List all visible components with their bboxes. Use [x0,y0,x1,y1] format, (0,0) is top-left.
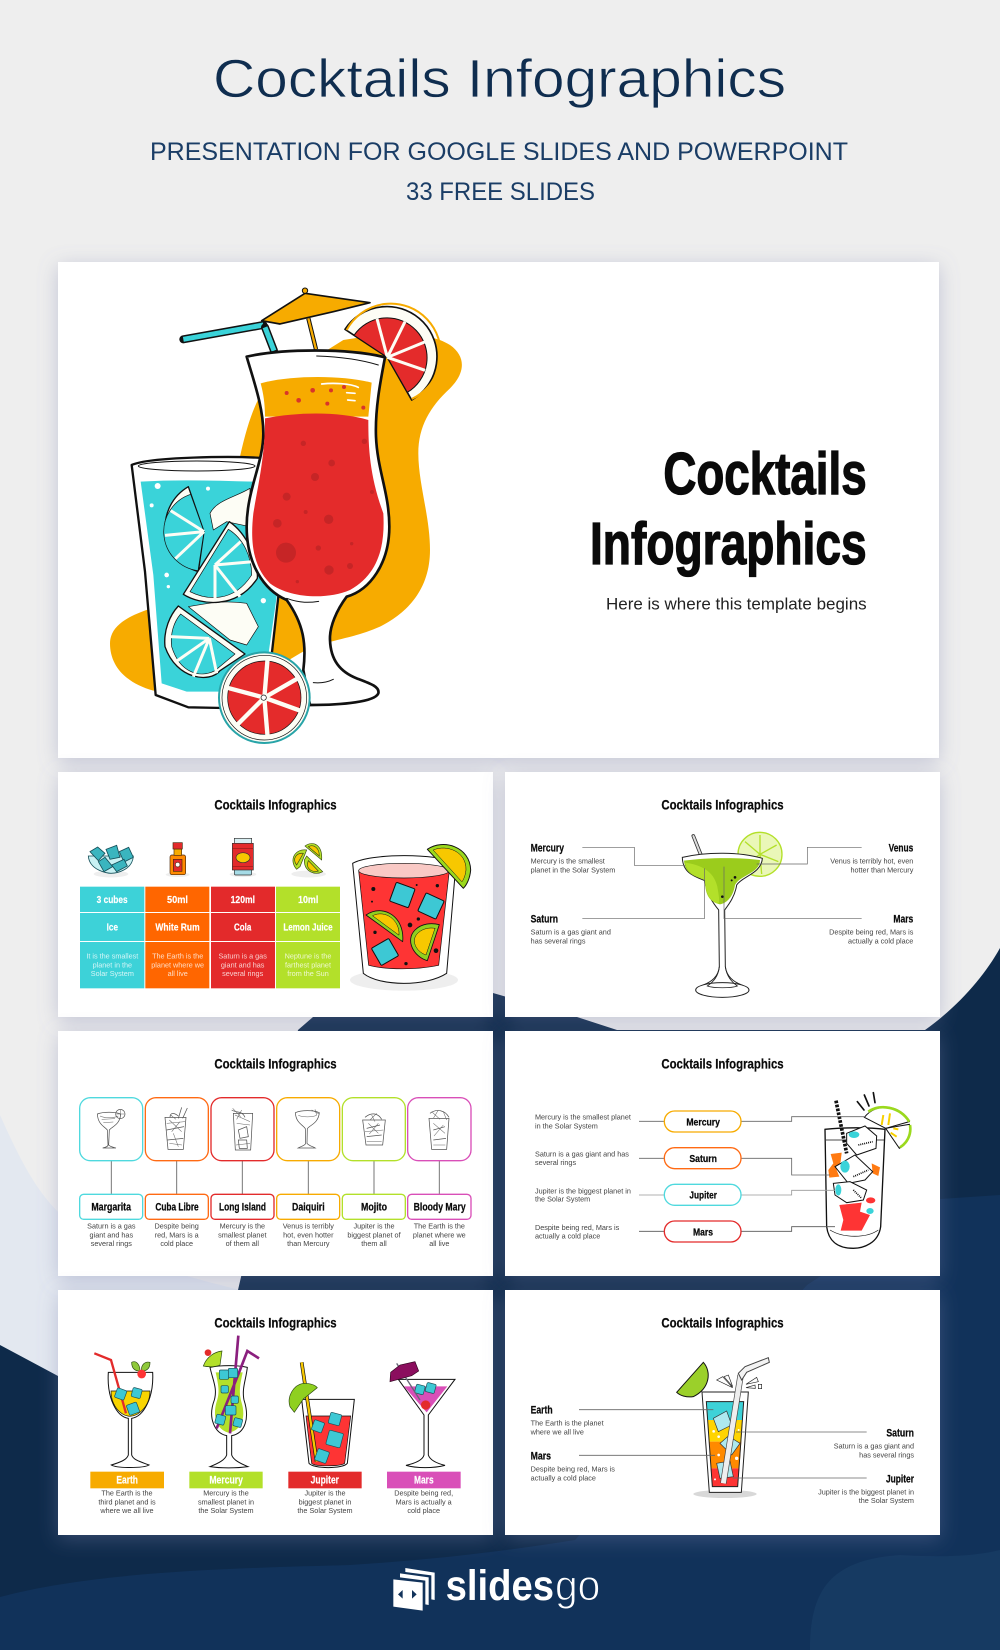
name pills [80,1194,471,1219]
label: Saturn [531,913,611,945]
pill labels: Mars [693,1227,713,1238]
drink: Earth [94,1353,153,1467]
illustration: margarita glass [682,832,782,997]
icon: rum bottle [166,843,190,877]
panel: margarita slide [505,772,940,1017]
table: ingredients: from the Sun [287,969,329,978]
hero title: Infographics [590,510,867,577]
descriptions: Mars is actually a [396,1497,453,1506]
table: ingredients: planet in the [93,960,132,969]
label: Venus: hotter than Mercury [850,865,914,874]
logo: slidesgo: go [555,1562,600,1610]
descriptions: Mercury is the [203,1489,249,1498]
table: ingredients: 10ml [298,895,319,906]
label: Venus: Venus [889,843,913,855]
pills [664,1111,741,1242]
connector lines [579,1410,867,1478]
pill labels: Jupiter [689,1191,717,1202]
table: ingredients: 50ml [167,895,188,906]
label: Earth [530,1405,604,1436]
panel: tall glass slide [505,1031,940,1276]
cocktail names: Cuba Libre [155,1201,199,1213]
illustration: cocktails [110,288,462,743]
label: Jupiter [818,1473,914,1505]
slide heading: Cocktails Infographics [214,796,337,812]
label: Mars: Despite being red, Mars is [531,1465,615,1474]
descriptions: Jupiter is the [353,1222,395,1231]
label: Saturn: Saturn [886,1428,914,1440]
descriptions: Saturn is a gas [87,1222,136,1231]
pill labels [686,1117,720,1238]
label: Saturn [834,1428,914,1459]
descriptions: several rings [535,1158,576,1167]
hero title: Cocktails [663,440,867,507]
descriptions: all live [429,1239,449,1248]
label bars: Mercury [209,1475,243,1487]
slide heading: Cocktails Infographics [661,796,784,812]
descriptions: Mercury is the smallest planet [535,1113,631,1122]
label: Mercury [531,843,615,874]
descriptions: Despite being [154,1222,199,1231]
descriptions: the Solar System [297,1506,353,1515]
illustration: tall glass [825,1093,910,1248]
connector lines [639,1117,865,1231]
descriptions: cold place [407,1506,440,1515]
label: Mars: Mars [893,913,913,925]
label: Mars: Despite being red, Mars is [829,928,914,937]
label: Mercury: planet in the Solar System [531,865,615,874]
panel: hero slide [58,262,939,758]
connector lines [582,847,862,919]
descriptions: biggest planet of [347,1230,402,1239]
descriptions: The Earth is the [414,1222,465,1231]
slide heading: Cocktails Infographics [214,1314,337,1330]
label: Mercury: Mercury [531,843,565,855]
pill labels: Mercury [686,1117,720,1128]
cocktail names: Margarita [91,1201,131,1213]
descriptions: them all [361,1239,387,1248]
descriptions: giant and has [90,1230,133,1239]
label: Mercury: Mercury is the smallest [531,857,605,866]
label: Jupiter: Jupiter [886,1473,914,1485]
panel: six cocktails slide [58,1031,493,1276]
descriptions: in the Solar System [535,1121,598,1130]
label: Saturn: Saturn is a gas giant and [531,928,611,937]
panel: ingredients table slide [58,772,493,1017]
table: ingredients: several rings [222,969,264,978]
cocktail names: Long Island [219,1201,266,1213]
label: Jupiter: Jupiter is the biggest planet in [818,1487,914,1496]
table: ingredients: giant and has [221,960,265,969]
descriptions: actually a cold place [535,1231,600,1240]
descriptions: planet where we [413,1230,466,1239]
label: Venus [830,843,914,874]
card: Mojito [342,1098,405,1161]
slide heading: Cocktails Infographics [661,1314,784,1330]
descriptions: of them all [226,1239,259,1248]
label bars: Mars [414,1475,434,1487]
descriptions: the Solar System [198,1506,254,1515]
label: Mars: actually a cold place [848,936,913,945]
label: Earth: The Earth is the planet [531,1419,604,1428]
descriptions: where we all live [99,1506,154,1515]
label: Saturn: has several rings [859,1450,914,1459]
cocktail names: Bloody Mary [414,1201,466,1213]
panel: layered drink slide [505,1290,940,1535]
table: ingredients: Neptune is the [285,952,331,961]
table: ingredients: Cola [234,923,252,934]
illustration: layered drink [677,1358,769,1498]
table: ingredients: all live [168,969,188,978]
connector lines [111,1161,439,1194]
subtitle: PRESENTATION FOR GOOGLE SLIDES AND POWERPOINT [150,138,848,166]
table: ingredients: Saturn is a gas [218,952,267,961]
descriptions: smallest planet [218,1230,267,1239]
descriptions: several rings [91,1239,132,1248]
descriptions: red, Mars is a [155,1230,200,1239]
descriptions: the Solar System [535,1195,590,1204]
label: Mars [531,1451,615,1482]
descriptions: than Mercury [287,1239,330,1248]
card: Margarita [80,1098,143,1161]
descriptions [87,1222,466,1248]
descriptions: smallest planet in [198,1497,254,1506]
table: ingredients: It is the smallest [86,952,138,961]
icon: cola can [230,838,256,877]
descriptions: Despite being red, Mars is [535,1223,620,1232]
table: ingredients: White Rum [155,923,200,934]
main heading: Cocktails Infographics [213,49,786,109]
descriptions: Mercury is the [220,1222,265,1231]
label: Mars: Mars [531,1451,551,1463]
descriptions: Jupiter is the biggest planet in [535,1186,631,1195]
icon: slides stack [393,1568,435,1611]
subtitle: 33 FREE SLIDES [406,178,595,206]
table: ingredients: 120ml [231,895,255,906]
descriptions [535,1113,631,1240]
cocktail names: Daiquiri [292,1201,325,1213]
icon: ice bowl [88,845,133,877]
drink: Jupiter [289,1362,354,1468]
table: ingredients: farthest planet [285,960,331,969]
icon: lemon wedges [291,844,326,877]
descriptions: The Earth is the [101,1489,153,1498]
label: Earth: where we all live [530,1427,584,1436]
table: ingredients: planet where we [151,960,204,969]
hero title [590,440,867,613]
logo: slidesgo [393,1562,600,1611]
descriptions: biggest planet in [299,1497,351,1506]
label: Saturn: Saturn is a gas giant and [834,1442,914,1451]
descriptions: cold place [160,1239,193,1248]
table: ingredients: 3 cubes [97,895,128,906]
label bars [90,1472,461,1488]
label bars: Jupiter [311,1475,339,1487]
card: Bloody Mary [408,1098,471,1161]
table: ingredients: The Earth is the [152,952,203,961]
subtitle [150,138,848,206]
drink: Mercury [203,1336,259,1468]
label: Earth: Earth [531,1405,553,1417]
illustration: red cocktail glass [350,845,471,991]
descriptions: hot, even hotter [283,1230,334,1239]
pill labels: Saturn [689,1154,717,1165]
table: ingredients: Ice [107,923,118,934]
descriptions: third planet and is [98,1497,156,1506]
label: Venus: Venus is terribly hot, even [830,857,913,866]
hero title: Here is where this template begins [606,594,867,613]
label: Mars [829,913,914,945]
card: Cuba Libre [145,1098,208,1161]
descriptions: Jupiter is the [304,1489,346,1498]
descriptions: Despite being red, [394,1489,453,1498]
label: Jupiter: the Solar System [859,1496,914,1505]
descriptions: Venus is terribly [283,1222,334,1231]
slide heading: Cocktails Infographics [661,1055,784,1071]
table: ingredients [80,887,340,988]
label bars: Earth [116,1475,138,1487]
logo: slidesgo: slides [446,1562,554,1610]
slide heading: Cocktails Infographics [214,1055,337,1071]
card: Daiquiri [277,1098,340,1161]
table: ingredients: Lemon Juice [283,923,333,934]
cocktail names [91,1201,466,1213]
cocktail names: Mojito [361,1201,387,1213]
label: Saturn: Saturn [531,913,558,925]
label: Saturn: has several rings [531,936,586,945]
drink: Mars [390,1362,455,1468]
card: Long Island [211,1098,274,1161]
descriptions: Saturn is a gas giant and has [535,1150,629,1159]
table: ingredients: Solar System [91,969,134,978]
descriptions [98,1489,453,1515]
panel: four drinks slide [58,1290,493,1535]
label: Mars: actually a cold place [531,1473,596,1482]
